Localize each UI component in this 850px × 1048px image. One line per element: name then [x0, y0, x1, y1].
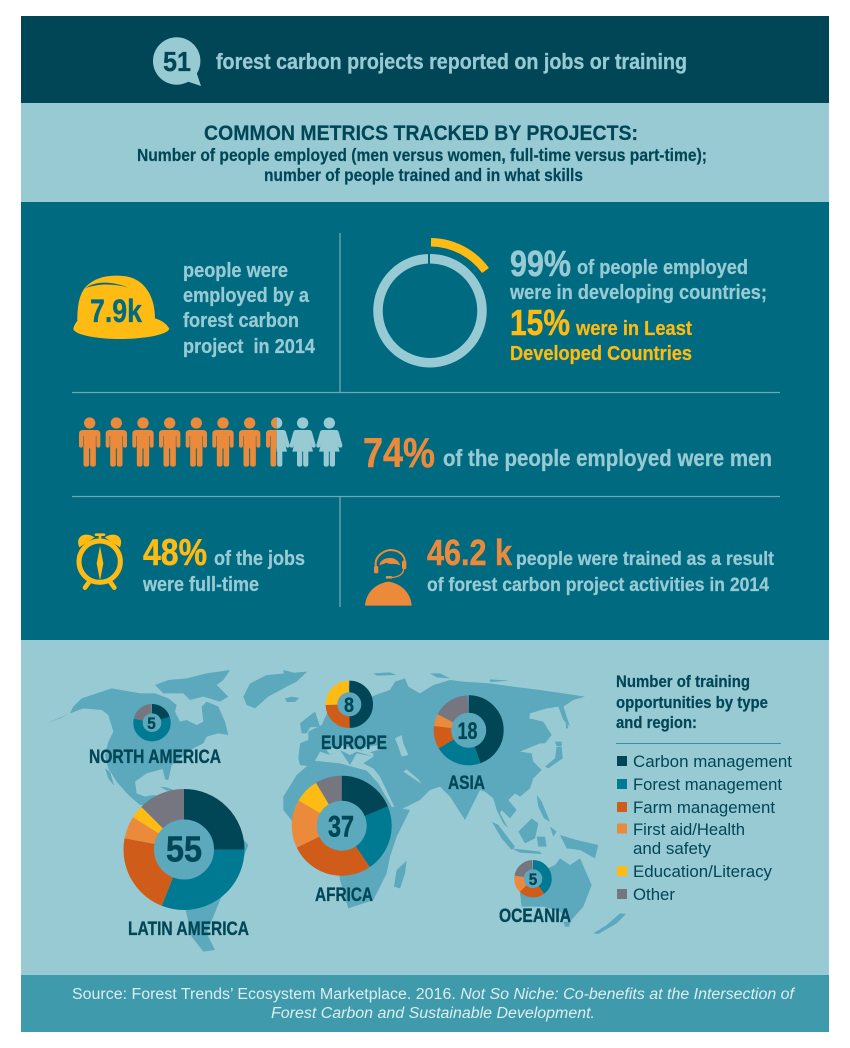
icon: person with headset [365, 550, 412, 606]
icon: hard hat with 7.9k [73, 276, 169, 339]
legend [616, 673, 792, 904]
donut: Oceania [519, 865, 547, 893]
text: 99 percent developing countries: were in developing countries; [509, 282, 767, 304]
donut: Asia: 18 [458, 718, 478, 745]
donut: North America: 5 [147, 715, 156, 733]
metrics heading: COMMON METRICS TRACKED BY PROJECTS: [204, 121, 638, 145]
footer source: Source: Forest Trends’ Ecosystem Marketplace. 2016. Not So Niche: Co-benefits at the Intersection of [72, 986, 796, 1003]
region labels: AFRICA [315, 885, 373, 906]
donut: Latin America [139, 804, 229, 895]
text: 48 percent full-time: were full-time [142, 574, 259, 596]
text: 99 percent developing countries: Developed Countries [510, 343, 692, 365]
donut: Africa [304, 788, 379, 863]
legend items [617, 753, 792, 904]
legend items: First aid/Health [633, 821, 745, 839]
text: 46.2 k trained: people were trained as a result [516, 549, 775, 570]
text: 99 percent developing countries: were in Least [575, 318, 692, 340]
text: 99 percent developing countries: of people employed [577, 257, 748, 279]
chart: developing countries ring [378, 242, 486, 363]
icon: alarm clock [78, 535, 121, 588]
text: people employed: project in 2014 [183, 336, 316, 358]
donut: Africa: 37 [328, 810, 354, 844]
region labels [89, 733, 571, 940]
legend items: Carbon management [633, 753, 792, 771]
donut: Europe: 8 [344, 694, 354, 717]
text: people employed [183, 260, 316, 358]
legend title: Number of training [616, 673, 750, 691]
header banner [21, 16, 829, 103]
region labels: EUROPE [321, 733, 387, 754]
icon: hard hat with 7.9k: 7.9k [90, 293, 142, 329]
donut: Oceania: 5 [529, 871, 537, 889]
text: 46.2 k trained: 46.2 k [427, 532, 513, 573]
legend items: Other [633, 886, 675, 904]
region labels: NORTH AMERICA [89, 747, 221, 768]
donut: Asia [442, 704, 495, 757]
text: 74 percent men: 74% [363, 429, 435, 476]
donut: North America [138, 709, 166, 737]
text: 99 percent developing countries: 99% [510, 243, 571, 284]
legend items: Education/Literacy [633, 863, 773, 881]
world map [47, 670, 626, 952]
header text: forest carbon projects reported on jobs or training [216, 49, 687, 74]
legend items: Farm management [633, 799, 775, 817]
icon: speech bubble: 51 [163, 46, 191, 77]
panel: employment statistics [21, 202, 829, 640]
donut: Latin America: 55 [166, 828, 202, 870]
footer source [21, 975, 829, 1032]
text: 74 percent men: of the people employed were men [443, 445, 772, 471]
donut: Europe [331, 686, 367, 722]
legend title [616, 673, 768, 732]
metrics description [137, 145, 707, 185]
panel: common metrics [21, 103, 829, 202]
footer source: Forest Carbon and Sustainable Development. [271, 1005, 595, 1022]
text: people employed: people were [183, 260, 288, 282]
text: 99 percent developing countries [509, 243, 767, 365]
icon: speech bubble [153, 37, 201, 86]
panel: training opportunities map [21, 640, 829, 975]
legend title: opportunities by type [616, 694, 768, 712]
legend items: and safety [633, 840, 712, 858]
text: 48 percent full-time: 48% [143, 532, 207, 573]
text: people employed: forest carbon [183, 310, 299, 332]
metrics description: Number of people employed (men versus women, full-time versus part-time); [137, 145, 707, 165]
legend items: Forest management [633, 776, 782, 794]
text: 99 percent developing countries: 15% [510, 302, 570, 343]
text: people employed: employed by a [183, 285, 310, 307]
metrics description: number of people trained and in what skills [264, 165, 583, 185]
text: 74 percent men [363, 429, 772, 476]
region labels: ASIA [448, 773, 485, 794]
text: 48 percent full-time: of the jobs [214, 548, 305, 570]
region labels: LATIN AMERICA [128, 919, 249, 940]
text: 46.2 k trained: of forest carbon project activities in 2014 [427, 575, 769, 596]
region labels: OCEANIA [499, 906, 571, 927]
text: 46.2 k trained [427, 532, 775, 596]
text: 48 percent full-time [142, 532, 305, 596]
icon row: men and women figures [79, 417, 342, 467]
legend title: and region: [616, 714, 697, 732]
